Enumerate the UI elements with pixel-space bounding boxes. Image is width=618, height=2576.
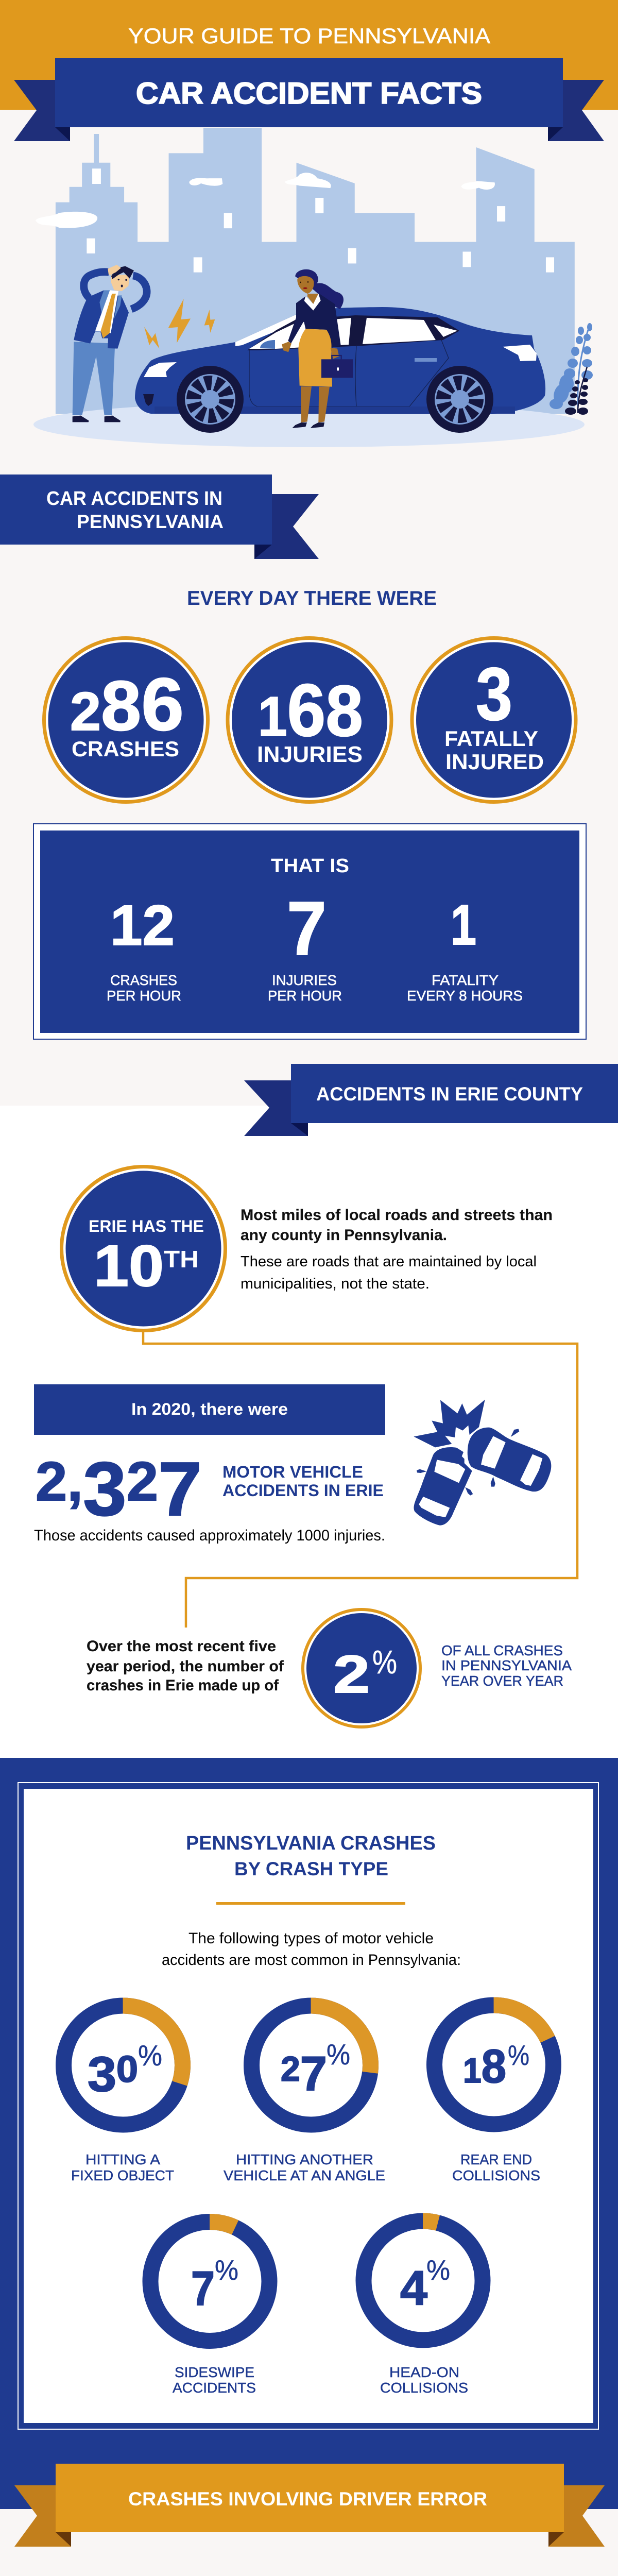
stat: 7 injuries per hour: 7	[287, 886, 327, 971]
donut: 7 percent: ACCIDENTS	[173, 2380, 256, 2396]
stat: 2,327 motor vehicle accidents: 3	[83, 1447, 127, 1532]
connector line	[143, 1332, 577, 1628]
stat circle: 3 fatally injured: INJURED	[445, 750, 544, 774]
icon: plant	[550, 323, 593, 415]
stat circle: 286 crashes	[44, 638, 208, 802]
panel intro text: The following types of motor vehicle	[188, 1930, 434, 1947]
donut: 7 percent: %	[215, 2254, 238, 2286]
donut: 18 percent: 18	[463, 2040, 506, 2093]
badge: Erie has the 10th	[62, 1166, 226, 1330]
hero illustration: city skyline	[36, 128, 575, 414]
text: most miles of local roads: any county in Pennsylvania.	[241, 1227, 447, 1244]
panel heading	[186, 1833, 436, 1879]
badge: 2 percent: %	[372, 1643, 397, 1681]
stat circle: 168 injuries: INJURIES	[257, 742, 363, 767]
donut: 4 percent	[364, 2221, 483, 2396]
section ribbon: accidents in Erie County	[244, 1064, 618, 1136]
donut: 27 percent: VEHICLE AT AN ANGLE	[224, 2167, 385, 2183]
stat: 2,327 motor vehicle accidents: 2	[127, 1450, 158, 1512]
car	[135, 307, 545, 433]
donut: 30 percent: %	[138, 2039, 162, 2072]
panel: that is	[33, 824, 586, 1039]
text: over the five year period: year period, the number of	[87, 1658, 284, 1675]
donut: 27 percent	[224, 2006, 385, 2183]
panel intro text	[162, 1930, 461, 1969]
text: of all crashes: OF ALL CRASHES	[441, 1642, 563, 1658]
text: most miles of local roads: These are roads that are maintained by local	[241, 1253, 537, 1270]
title ribbon	[14, 58, 604, 141]
donut: 7 percent	[150, 2222, 269, 2396]
donut: 30 percent: 3	[88, 2047, 116, 2102]
badge: Erie has the 10th: TH	[164, 1246, 199, 1273]
stat: 2,327 motor vehicle accidents	[34, 1447, 385, 1544]
stat: 12 crashes per hour	[107, 894, 181, 1004]
text: most miles of local roads: Most miles of local roads and streets than	[241, 1207, 553, 1224]
stat: 2,327 motor vehicle accidents: 2,	[36, 1450, 81, 1512]
ribbon heading: CAR ACCIDENTS IN	[46, 488, 222, 510]
stat circle: 168 injuries	[228, 638, 391, 802]
text: most miles of local roads: municipalities, not the state.	[241, 1276, 430, 1292]
heading: every day: EVERY DAY THERE WERE	[187, 587, 437, 609]
text: of all crashes: IN PENNSYLVANIA	[441, 1657, 572, 1673]
panel: Pennsylvania crashes by crash type	[0, 1758, 618, 2509]
donut: 30 percent: 0	[116, 2049, 138, 2090]
donut: 27 percent: 2	[281, 2049, 300, 2089]
callout header: in 2020: In 2020, there were	[131, 1400, 288, 1418]
stat: 2,327 motor vehicle accidents: MOTOR VEHICLE	[222, 1463, 363, 1481]
donut: 18 percent: %	[508, 2039, 529, 2071]
text: of all crashes	[441, 1642, 572, 1689]
badge: 2 percent: 2	[333, 1645, 370, 1704]
eyebrow title: YOUR GUIDE TO PENNSYLVANIA	[128, 24, 490, 48]
donut: 18 percent: COLLISIONS	[452, 2167, 540, 2183]
text: most miles of local roads	[241, 1207, 553, 1292]
ribbon heading: PENNSYLVANIA	[77, 511, 224, 532]
stat circle: 3 fatally injured	[412, 638, 576, 802]
stat: 1 fatality every 8 hours	[407, 893, 523, 1004]
stat circle: 286 crashes: CRASHES	[72, 737, 179, 761]
ground shadow	[33, 402, 585, 447]
donut: 4 percent: HEAD-ON	[389, 2364, 459, 2380]
donut: 30 percent: HITTING A	[85, 2151, 160, 2167]
donut: 4 percent: %	[426, 2254, 450, 2286]
donut: 27 percent: %	[327, 2038, 350, 2071]
main title: CAR ACCIDENT FACTS	[136, 77, 482, 110]
stat circle: 3 fatally injured: 3	[476, 652, 512, 736]
stat: 2,327 motor vehicle accidents: 7	[158, 1447, 202, 1532]
panel heading: BY CRASH TYPE	[234, 1858, 388, 1879]
section ribbon: crashes involving driver error	[14, 2464, 605, 2547]
donut: 18 percent	[435, 2005, 553, 2183]
front wheel	[177, 366, 244, 433]
ribbon heading	[46, 488, 224, 532]
donut: 30 percent: FIXED OBJECT	[71, 2167, 174, 2183]
text: of all crashes: YEAR OVER YEAR	[441, 1673, 563, 1689]
donut: 27 percent: HITTING ANOTHER	[236, 2151, 373, 2167]
text: over the five year period: crashes in Erie made up of	[87, 1677, 279, 1694]
stat: 1 fatality every 8 hours: 1	[451, 893, 476, 957]
stat circle: 168 injuries: 168	[258, 669, 363, 752]
section ribbon: car accidents in Pennsylvania	[0, 474, 319, 559]
text: over the five year period	[87, 1638, 284, 1694]
donut: 18 percent: REAR END	[460, 2151, 532, 2167]
woman with briefcase	[282, 269, 353, 428]
badge: Erie has the 10th: 10	[94, 1233, 164, 1298]
stat: 12 crashes per hour: CRASHES	[110, 972, 177, 988]
stat: 12 crashes per hour: PER HOUR	[107, 988, 181, 1004]
rear wheel	[426, 366, 493, 433]
donut: 7 percent: SIDESWIPE	[175, 2364, 254, 2380]
panel intro text: accidents are most common in Pennsylvania:	[162, 1952, 461, 1969]
panel heading: PENNSYLVANIA CRASHES	[186, 1833, 436, 1854]
man with hands on head	[73, 265, 147, 422]
stat circle: 3 fatally injured: FATALLY	[444, 726, 538, 751]
stat: 7 injuries per hour	[268, 886, 342, 1004]
donut: 4 percent: COLLISIONS	[380, 2380, 468, 2396]
icon: two cars crashing	[414, 1400, 551, 1526]
impact lightning bolts	[144, 299, 215, 349]
stat: 12 crashes per hour: 12	[110, 894, 175, 957]
stat: 2,327 motor vehicle accidents: ACCIDENTS IN ERIE	[222, 1481, 384, 1500]
stat: 1 fatality every 8 hours: FATALITY	[432, 972, 499, 988]
stat circle: 286 crashes: 286	[70, 663, 184, 746]
stat: 2,327 motor vehicle accidents: Those accidents caused approximately 1000 injuries.	[34, 1527, 385, 1544]
panel: that is: THAT IS	[271, 855, 349, 877]
donut: 27 percent: 7	[300, 2046, 327, 2100]
stat: 7 injuries per hour: INJURIES	[272, 972, 337, 988]
header band	[0, 0, 618, 110]
badge: 2 percent	[303, 1609, 420, 1727]
text: over the five year period: Over the most recent five	[87, 1638, 276, 1655]
stat: 7 injuries per hour: PER HOUR	[268, 988, 342, 1004]
donut: 4 percent: 4	[400, 2261, 427, 2315]
section ribbon: crashes involving driver error: CRASHES INVOLVING DRIVER ERROR	[128, 2488, 487, 2510]
section ribbon: accidents in Erie County: ACCIDENTS IN ERIE COUNTY	[316, 1083, 583, 1105]
callout header: in 2020	[34, 1384, 385, 1435]
donut: 30 percent	[64, 2006, 182, 2183]
donut: 7 percent: 7	[191, 2261, 215, 2315]
badge: Erie has the 10th: ERIE HAS THE	[89, 1217, 204, 1235]
stat: 1 fatality every 8 hours: EVERY 8 HOURS	[407, 988, 523, 1004]
